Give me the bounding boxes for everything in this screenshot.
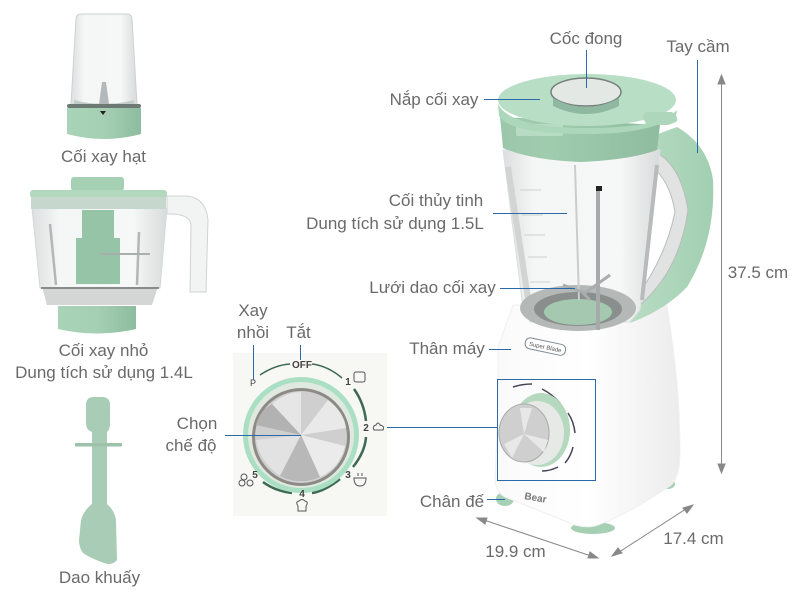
- blender dial arcs: [513, 384, 575, 471]
- label: width: 19.9 cm: [485, 542, 546, 561]
- dial labels: 3: [345, 470, 351, 481]
- dial labels: 4: [299, 489, 305, 500]
- measuring cup: [551, 78, 621, 106]
- label: lid: Nắp cối xay: [390, 90, 479, 109]
- blender feet: [496, 479, 675, 534]
- blue box around blender dial: [498, 380, 596, 480]
- dial scale arcs: [260, 364, 366, 493]
- blender base: [495, 305, 680, 527]
- label: blade: Lưới dao cối xay: [369, 278, 496, 297]
- dimension arrow: width: [477, 518, 598, 558]
- label: height: 37.5 cm: [728, 263, 788, 282]
- dial labels: P: [250, 378, 256, 388]
- label: spatula: Dao khuấy: [59, 568, 141, 587]
- label: feet: Chân đế: [420, 492, 485, 511]
- jar scale marks: [520, 190, 550, 282]
- blender logo: Bear: [523, 491, 547, 506]
- product: grain grinder cup: [67, 14, 141, 139]
- label: measuring cup: Cốc đong: [550, 29, 622, 48]
- label: small chopper capacity: Dung tích sử dụng 1.4L: [15, 363, 193, 382]
- dial labels: OFF: [292, 360, 312, 371]
- label: body: Thân máy: [409, 339, 485, 358]
- dimension arrow: height: [718, 75, 725, 473]
- product: small chopper bowl: [30, 177, 208, 334]
- blender dial knob: [499, 393, 570, 467]
- dial labels: 2: [363, 423, 369, 434]
- product: main blender: [495, 74, 713, 534]
- dial labels: 5: [252, 470, 258, 481]
- label: off: Tắt: [286, 323, 311, 342]
- label: handle: Tay cầm: [666, 37, 730, 56]
- label: pulse mode line two: nhồi: [237, 323, 269, 342]
- blender lid band: [500, 117, 660, 162]
- label: small chopper: Cối xay nhỏ: [59, 341, 148, 360]
- dial labels: 1: [345, 377, 351, 388]
- leader lines: [225, 50, 698, 500]
- dial labels: [250, 360, 369, 500]
- super blade badge: [524, 337, 567, 356]
- label: pulse mode: Xay: [238, 301, 268, 320]
- product: spatula: [75, 397, 122, 564]
- label: grain grinder: Cối xay hạt: [61, 147, 146, 166]
- panel: control dial close-up: [233, 353, 387, 516]
- label: glass jar: Cối thủy tinh: [389, 191, 483, 210]
- label: mode select: Chọn: [177, 414, 217, 433]
- dial mode icons: [239, 372, 384, 511]
- blender jar: [503, 150, 660, 322]
- blender handle: [630, 127, 713, 323]
- super blade badge: Super Blade: [528, 342, 563, 355]
- label: mode select line two: chế độ: [165, 436, 217, 455]
- blender lid: [498, 74, 676, 126]
- label: depth: 17.4 cm: [663, 529, 724, 548]
- dimension arrow: depth: [612, 505, 693, 556]
- label: jar capacity: Dung tích sử dụng 1.5L: [306, 214, 484, 233]
- dial knob: [243, 377, 359, 493]
